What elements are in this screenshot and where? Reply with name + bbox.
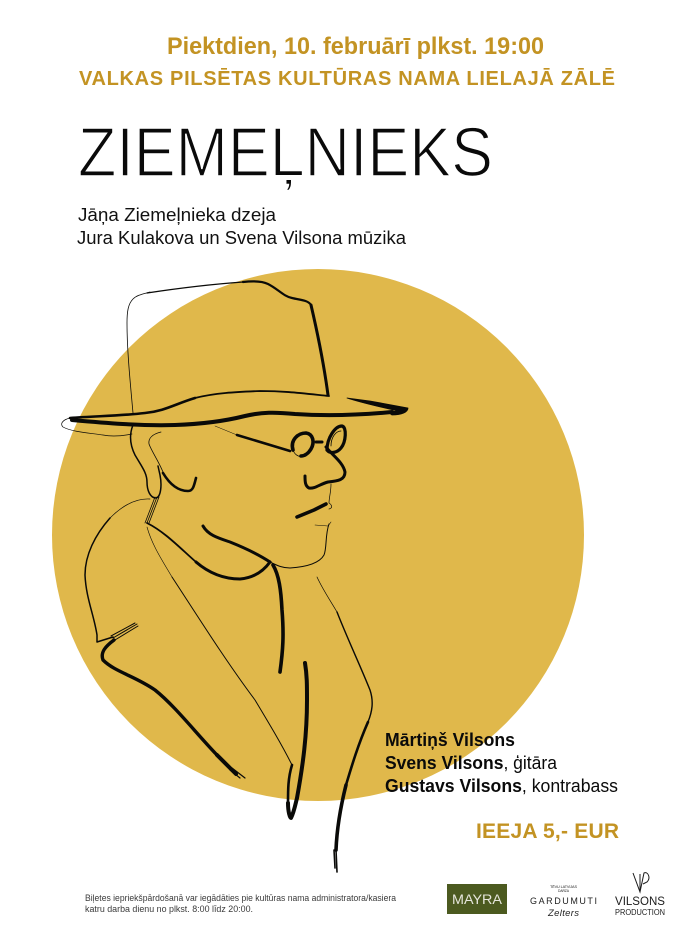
left shoulder and arm bbox=[85, 499, 245, 778]
logo: Gardumuti Zelters: DARZA bbox=[558, 889, 570, 893]
hat bbox=[62, 281, 408, 436]
yellow circle bbox=[52, 269, 584, 801]
logo: Gardumuti Zelters bbox=[530, 885, 597, 919]
collar bbox=[147, 523, 283, 672]
event date heading: Piektdien, 10. februārī plkst. 19:00 bbox=[167, 33, 544, 60]
ticket information: katru darba dienu no plkst. 8:00 līdz 20:00. bbox=[85, 904, 253, 915]
logo: Vilsons Production: VILSONS bbox=[615, 896, 665, 908]
logo: Mayra: MAYRA bbox=[452, 891, 503, 907]
chin and jaw bbox=[203, 524, 329, 568]
performers list: Svens Vilsons, ģitāra bbox=[385, 753, 558, 773]
glasses bbox=[215, 426, 345, 457]
logo: Gardumuti Zelters: GARDUMUTI bbox=[530, 896, 597, 906]
subtitle text: Jāņa Ziemeļnieka dzeja bbox=[78, 205, 277, 225]
back line bbox=[317, 577, 372, 872]
venue heading: VALKAS PILSĒTAS KULTŪRAS NAMA LIELAJĀ ZĀLĒ bbox=[79, 68, 615, 90]
logo: Vilsons Production bbox=[615, 873, 665, 917]
performers list bbox=[385, 730, 618, 796]
head and ear bbox=[131, 425, 196, 523]
performers list: Gustavs Vilsons, kontrabass bbox=[385, 776, 618, 796]
logo: Gardumuti Zelters: Zelters bbox=[547, 908, 579, 919]
logo: Vilsons Production: PRODUCTION bbox=[615, 907, 665, 917]
title: ZIEMEĻNIEKS bbox=[78, 113, 493, 191]
logo: Gardumuti Zelters: TĒVU LATVIJAS bbox=[550, 885, 577, 889]
ticket information bbox=[85, 893, 397, 915]
nose and mouth bbox=[297, 447, 345, 526]
subtitle text bbox=[77, 205, 407, 248]
portrait line drawing bbox=[62, 281, 408, 872]
subtitle text: Jura Kulakova un Svena Vilsona mūzika bbox=[77, 228, 407, 248]
entry price: IEEJA 5,- EUR bbox=[476, 820, 619, 843]
performers list: Mārtiņš Vilsons bbox=[385, 730, 515, 750]
ticket information: Biļetes iepriekšpārdošanā var iegādāties pie kultūras nama administratora/kasiera bbox=[85, 893, 397, 904]
jacket lapel bbox=[147, 527, 307, 818]
logo: Mayra bbox=[447, 884, 507, 914]
